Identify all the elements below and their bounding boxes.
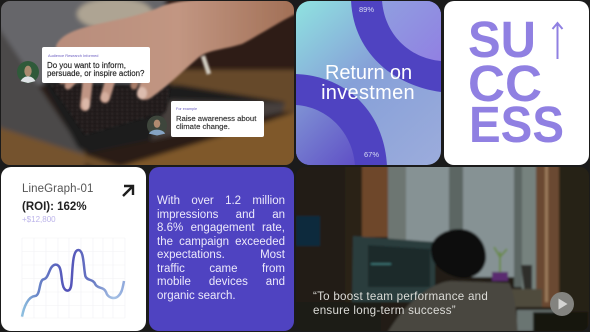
chart title: LineGraph-01 bbox=[22, 183, 94, 195]
quote text: “To boost team performance and bbox=[313, 290, 488, 303]
wordmark: success: CC bbox=[468, 55, 542, 112]
photo: hands on laptop bbox=[1, 1, 294, 165]
quote text bbox=[313, 290, 488, 316]
panel: campaign summary bbox=[149, 167, 294, 331]
panel: success bbox=[444, 1, 589, 165]
heading: return on investment: investmen bbox=[321, 82, 415, 104]
icon: woman avatar bbox=[17, 61, 39, 83]
panel: quote over photo bbox=[296, 167, 589, 331]
callout: example bbox=[171, 101, 264, 137]
callout: audience question bbox=[42, 47, 150, 83]
photo: person at monitor by window bbox=[296, 167, 589, 331]
callout question text bbox=[47, 61, 144, 78]
summary text: mobile devices and bbox=[157, 276, 285, 288]
panel: typing on laptop photo bbox=[1, 1, 294, 165]
gradient arcs graphic bbox=[296, 1, 441, 165]
icon: play button bbox=[550, 292, 574, 316]
callout label: For example bbox=[176, 107, 197, 111]
ROI value: (ROI): 162% bbox=[22, 201, 87, 213]
heading: return on investment bbox=[321, 62, 415, 104]
summary text bbox=[157, 195, 285, 302]
icon: up arrow bbox=[552, 23, 562, 59]
summary text: 8.6% engagement rate, bbox=[157, 222, 285, 234]
quote text: ensure long-term success” bbox=[313, 304, 456, 316]
icon: arrow up right bbox=[122, 184, 134, 197]
wordmark: success: SU bbox=[468, 11, 536, 68]
line chart bbox=[20, 238, 126, 318]
dollar gain: +$12,800 bbox=[22, 215, 56, 224]
summary text: With over 1.2 million bbox=[157, 195, 285, 207]
summary text: organic search. bbox=[157, 290, 236, 302]
callout question text: persuade, or inspire action? bbox=[47, 69, 144, 78]
callout question text: Do you want to inform, bbox=[47, 61, 126, 70]
callout example text: Raise awareness about bbox=[176, 114, 256, 123]
callout label: Audience Research Informed bbox=[48, 53, 98, 58]
label: 89%: 89% bbox=[359, 5, 374, 14]
label: 67%: 67% bbox=[364, 150, 379, 159]
panel: return on investment bbox=[296, 1, 441, 165]
heading: return on investment: Return on bbox=[325, 62, 412, 84]
summary text: expectations. Most bbox=[157, 249, 285, 261]
panel: line graph bbox=[1, 167, 146, 331]
summary text: traffic came from bbox=[157, 262, 285, 274]
callout example text bbox=[176, 114, 256, 131]
icon: man avatar bbox=[147, 116, 167, 136]
summary text: impressions and an bbox=[157, 208, 285, 220]
wordmark: success bbox=[468, 11, 564, 153]
summary text: the campaign exceeded bbox=[157, 236, 285, 248]
callout example text: climate change. bbox=[176, 122, 230, 131]
wordmark: success: ESS bbox=[469, 96, 564, 153]
